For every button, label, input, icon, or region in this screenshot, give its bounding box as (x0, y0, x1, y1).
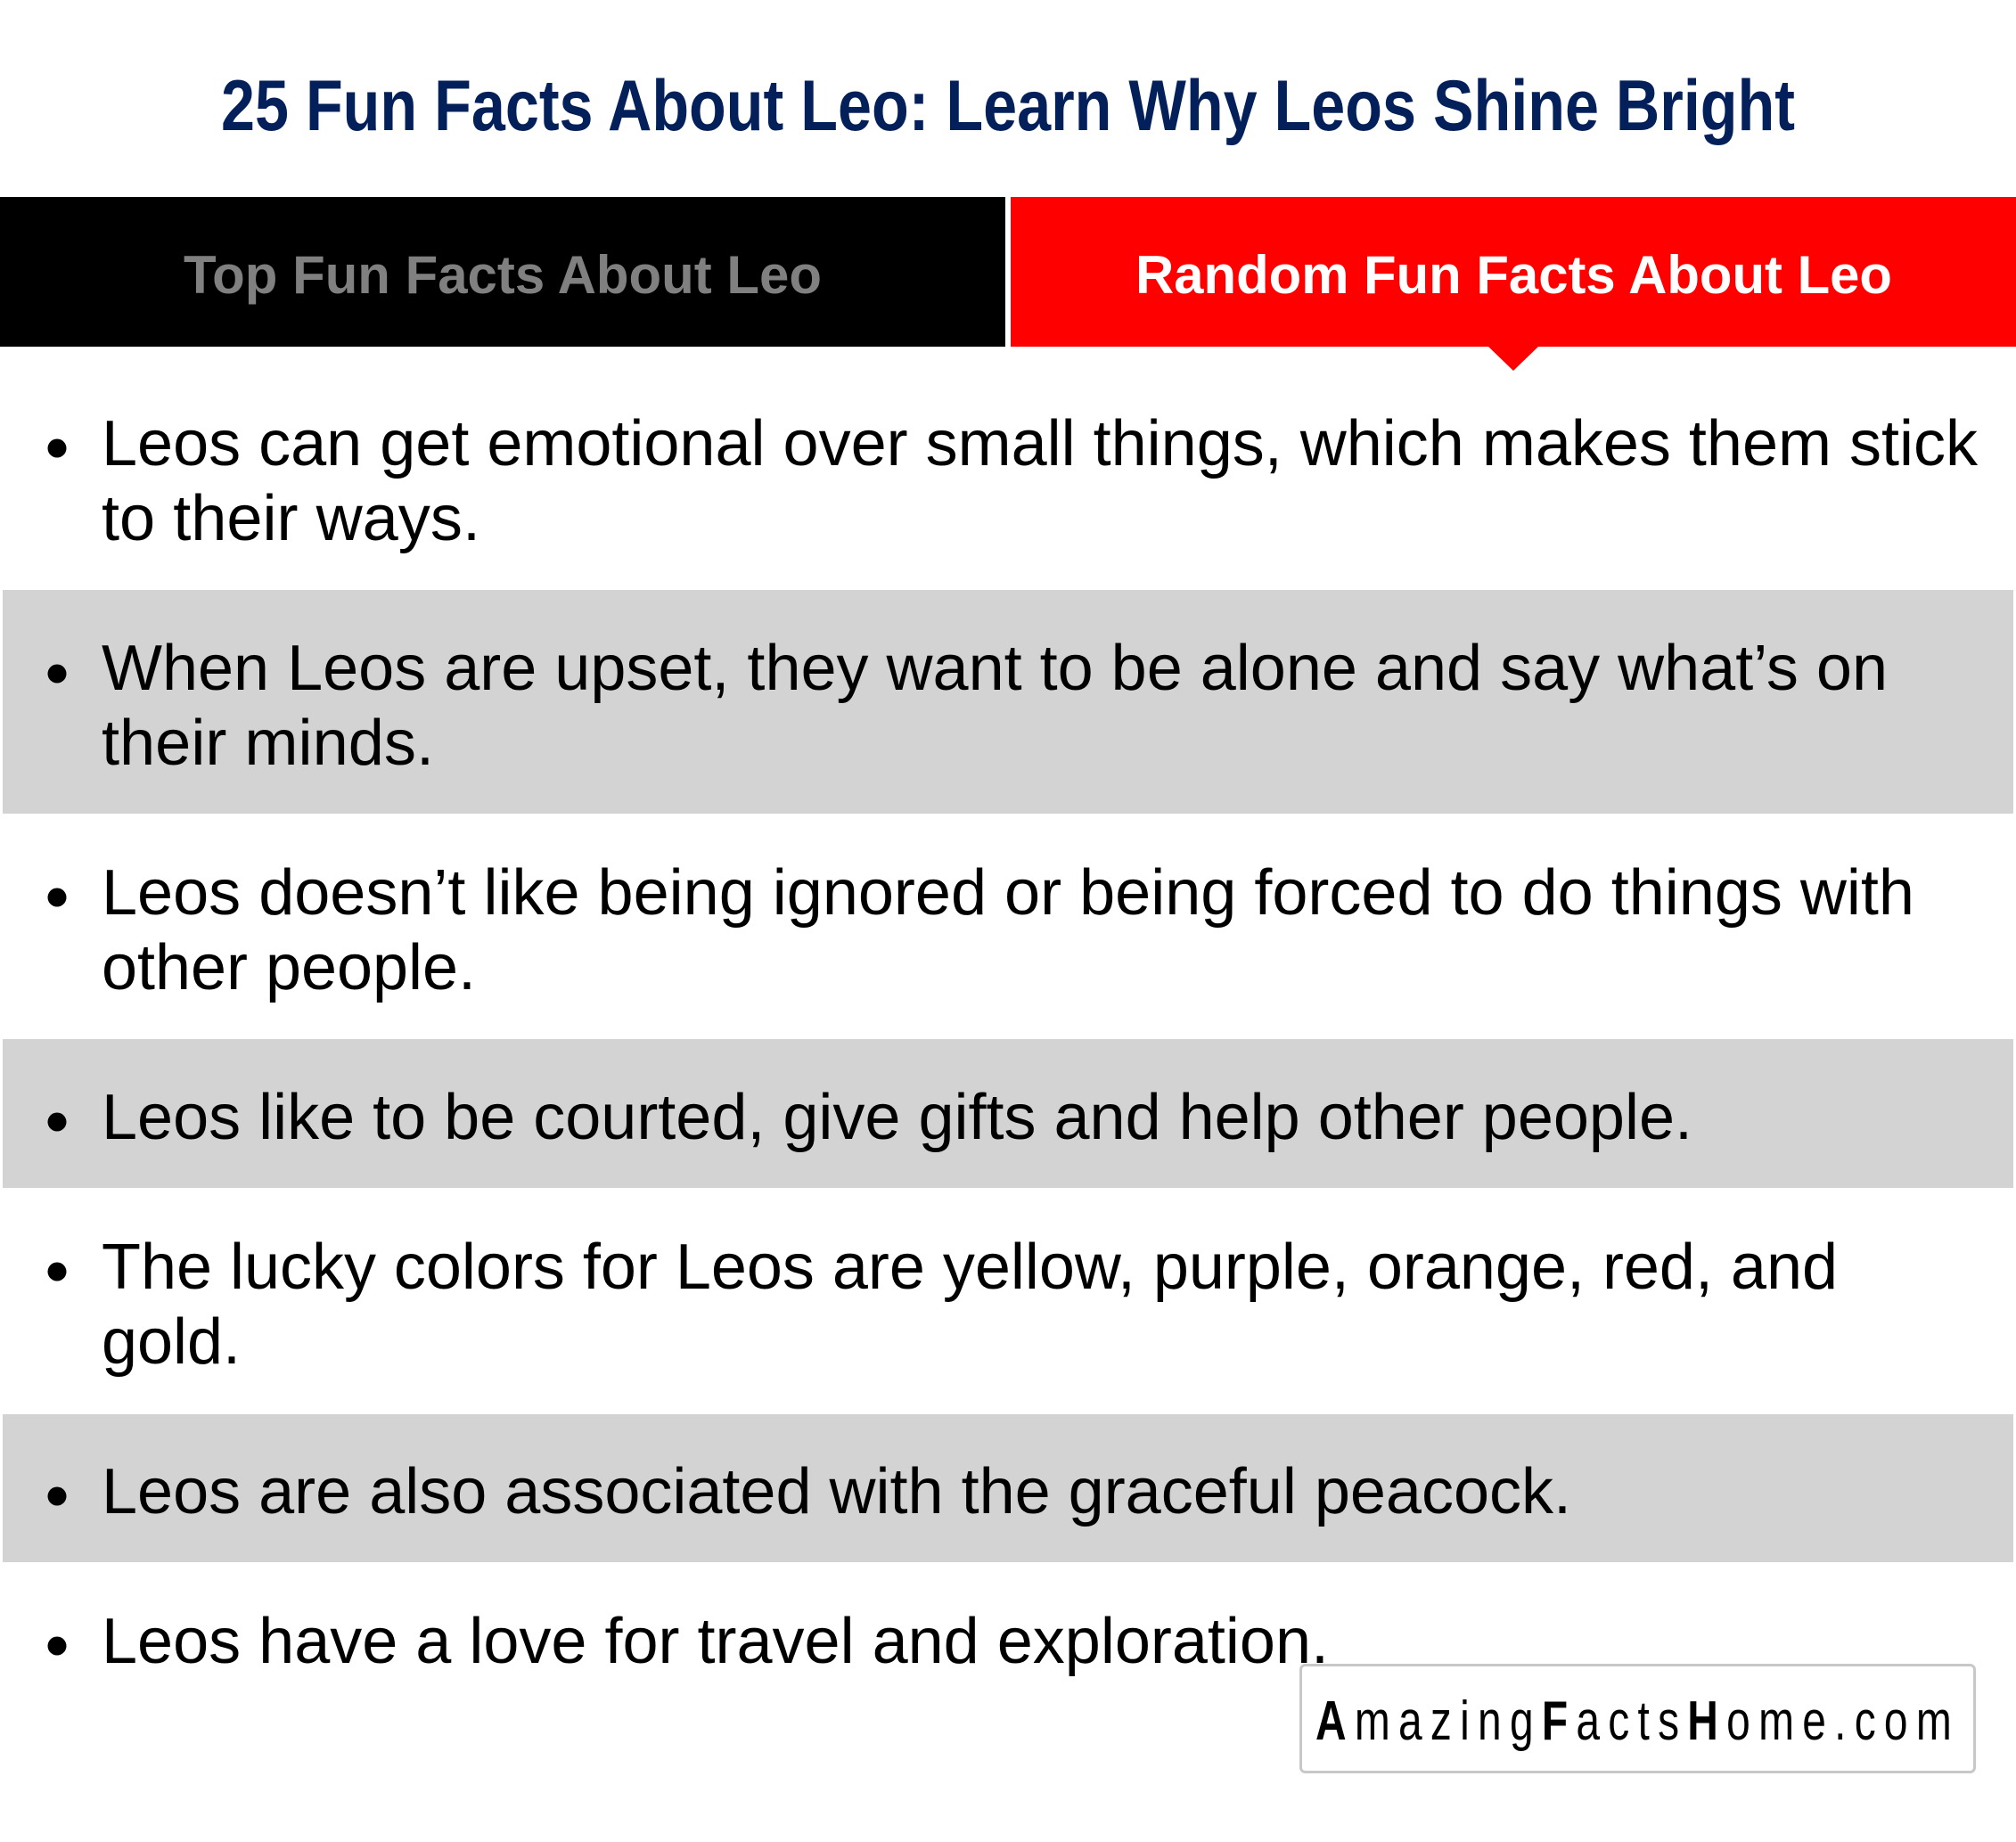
fact 1 (48, 408, 1979, 554)
fact 5: gold. (102, 1306, 241, 1378)
fact 4 row: Leos like to be courted, give gifts and help other people. (102, 1082, 1692, 1153)
fact 3: other people. (102, 932, 476, 1003)
fact 5 (48, 1232, 1838, 1378)
fact 3 (48, 857, 1914, 1003)
fact 2 row: When Leos are upset, they want to be alone and say what’s on (102, 633, 1888, 704)
fact 6 row (3, 1414, 2013, 1562)
fact 6 row: Leos are also associated with the graceful peacock. (102, 1456, 1571, 1527)
tab: random fun facts (active) (1011, 197, 2016, 371)
fact 5: The lucky colors for Leos are yellow, purple, orange, red, and (102, 1232, 1838, 1303)
tab: top fun facts (inactive): Top Fun Facts About Leo (184, 245, 822, 305)
fact 7: Leos have a love for travel and exploration. (102, 1606, 1329, 1677)
fact 1: Leos can get emotional over small things, which makes them stick (102, 408, 1979, 479)
watermark badge (1301, 1665, 1975, 1772)
tab: random fun facts (active): Random Fun Facts About Leo (1135, 245, 1892, 305)
fact 4 row (3, 1039, 2013, 1188)
fact 2 row: their minds. (102, 708, 434, 779)
fact 1: to their ways. (102, 483, 480, 554)
fact 2 row (3, 590, 2013, 814)
watermark badge: AmazingFactsHome.com (1315, 1691, 1960, 1752)
fact 3: Leos doesn’t like being ignored or being forced to do things with (102, 857, 1914, 929)
tab: top fun facts (inactive) (0, 197, 1005, 347)
